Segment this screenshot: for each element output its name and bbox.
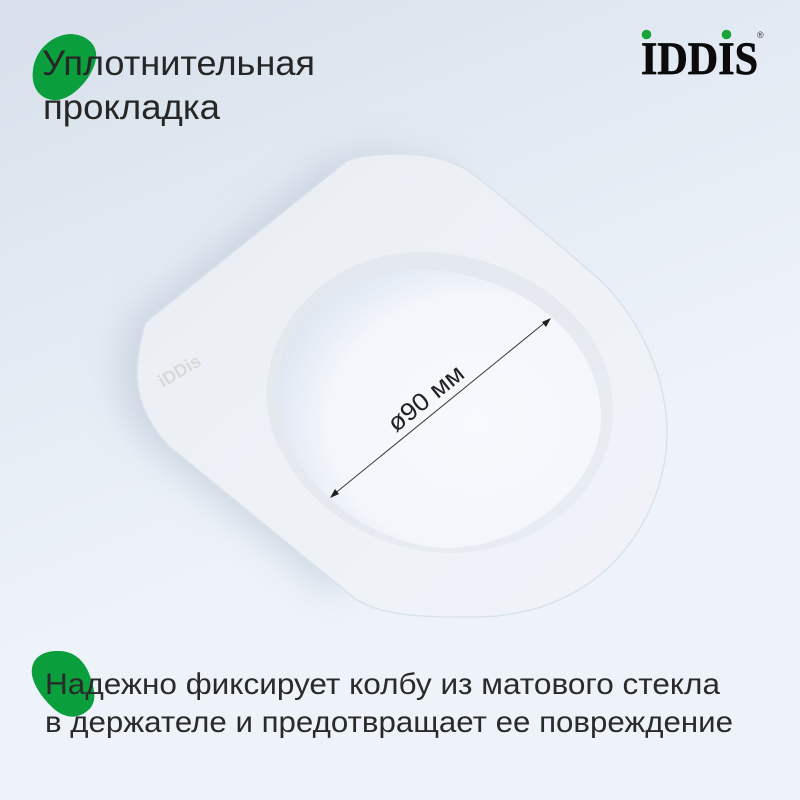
dimension arrow (330, 318, 551, 498)
description text: в держателе и предотвращает ее повреждение (45, 706, 733, 739)
logo green dots (642, 30, 731, 39)
logo: IDDIS (641, 33, 758, 85)
embossed logo on gasket: iDDis (155, 351, 204, 391)
description text: Надежно фиксирует колбу из матового стекла (45, 668, 720, 701)
sealing gasket photo (119, 154, 667, 617)
title: Уплотнительная (42, 43, 315, 83)
description accent blob (32, 651, 94, 717)
title: прокладка (43, 87, 220, 127)
title accent blob (33, 34, 96, 100)
dimension label: ø90 мм (382, 359, 470, 438)
registered mark: ® (757, 30, 764, 40)
